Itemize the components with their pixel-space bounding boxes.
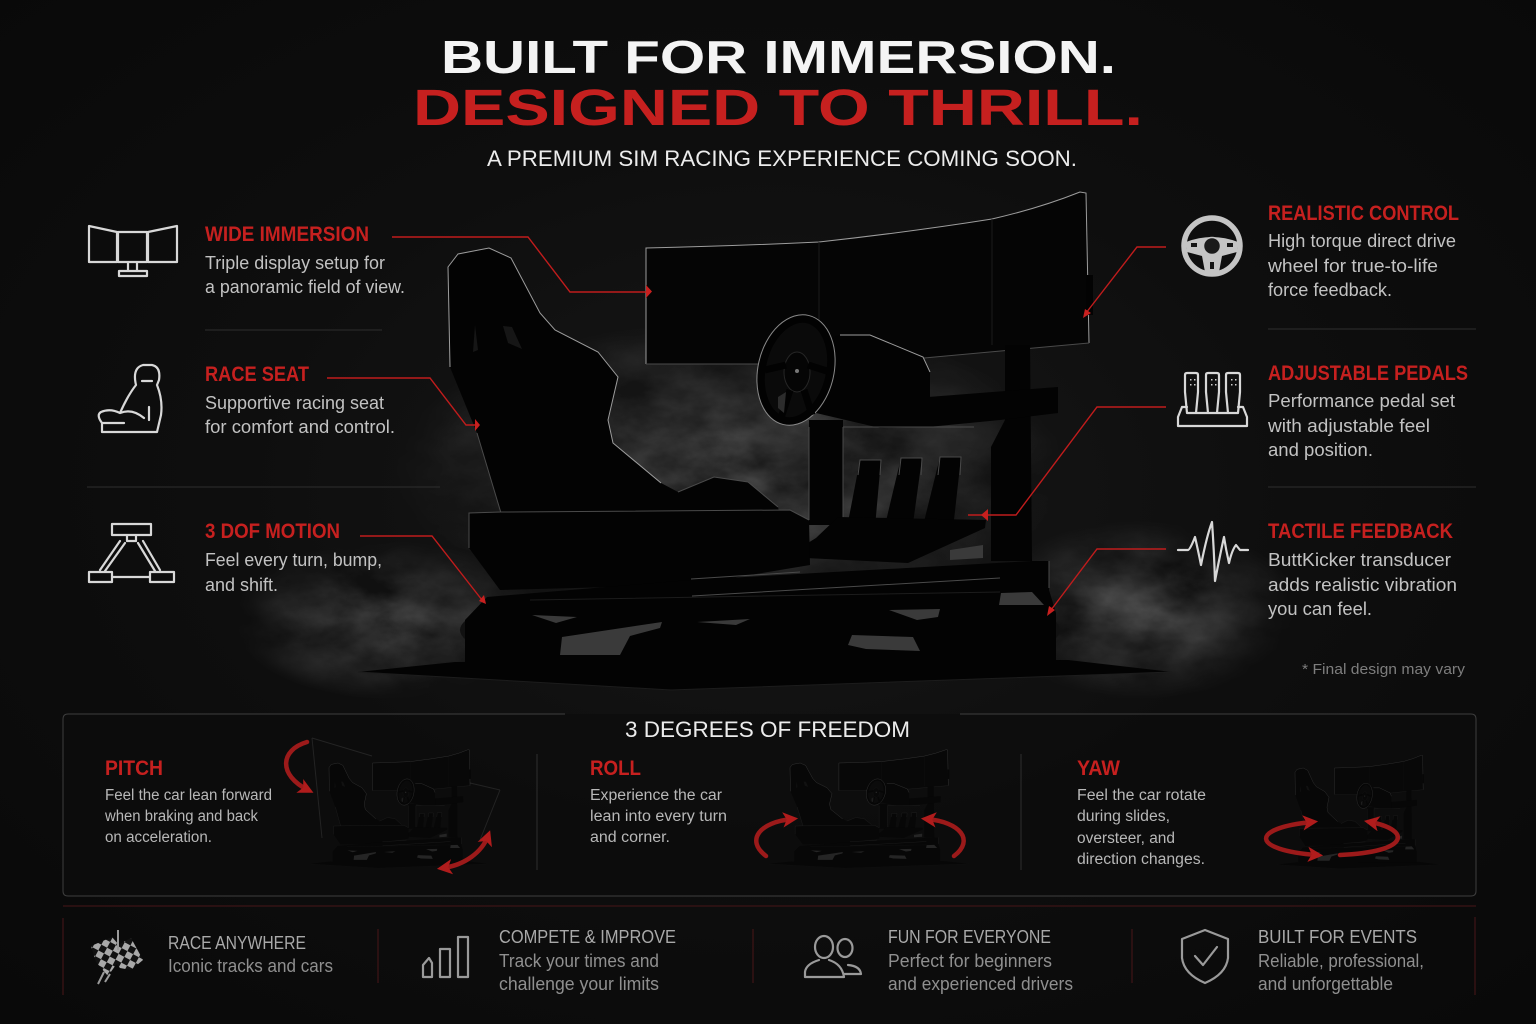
- item: race anywhere: [168, 933, 333, 976]
- item: built for events: and unforgettable: [1258, 974, 1393, 994]
- yaw section: YAW: [1077, 757, 1120, 780]
- feature: adjustable pedals: [1267, 362, 1468, 460]
- headline line 2: DESIGNED TO THRILL.: [413, 79, 1143, 136]
- feature: wide immersion: [205, 223, 405, 297]
- panel: left features: [87, 223, 440, 595]
- support columns: [809, 345, 1032, 561]
- feature: wide immersion: a panoramic field of view.: [205, 277, 405, 297]
- feature: adjustable pedals: ADJUSTABLE PEDALS: [1268, 362, 1468, 385]
- race seat: [448, 248, 790, 560]
- feature: realistic control: High torque direct drive: [1268, 231, 1456, 251]
- base gaps: [532, 592, 1044, 655]
- feature: tactile feedback: you can feel.: [1268, 599, 1372, 619]
- yaw section: oversteer, and: [1077, 830, 1175, 847]
- item: fun for everyone: Perfect for beginners: [888, 951, 1052, 971]
- cockpit frame: [465, 561, 1056, 662]
- icon: race seat: [99, 365, 162, 432]
- yaw section: during slides,: [1077, 808, 1170, 825]
- feature: 3 DOF motion: 3 DOF MOTION: [205, 520, 340, 543]
- icon: bar chart: [423, 937, 468, 977]
- item: built for events: [1258, 927, 1424, 994]
- feature: race seat: RACE SEAT: [205, 363, 309, 386]
- item: fun for everyone: FUN FOR EVERYONE: [888, 927, 1051, 947]
- item: race anywhere: Iconic tracks and cars: [168, 956, 333, 976]
- icon: checkered flags: [91, 930, 143, 984]
- icon: people: [805, 936, 861, 977]
- feature: race seat: Supportive racing seat: [205, 393, 384, 413]
- callout lines: [327, 237, 1166, 616]
- item: compete and improve: Track your times and: [499, 951, 659, 971]
- roll section: and corner.: [590, 829, 670, 846]
- callout: race seat: [327, 378, 480, 431]
- yaw section: Feel the car rotate: [1077, 787, 1206, 804]
- roll section: [590, 757, 727, 846]
- feature: adjustable pedals: with adjustable feel: [1267, 416, 1430, 436]
- headline line 1: BUILT FOR IMMERSION.: [441, 31, 1116, 83]
- icon: 3 DOF motion: [89, 524, 174, 582]
- panel frame: [63, 714, 1476, 896]
- panel heading: 3 DEGREES OF FREEDOM: [625, 717, 910, 742]
- callout: realistic control: [1083, 247, 1166, 318]
- feature: realistic control: REALISTIC CONTROL: [1268, 202, 1459, 225]
- feature: tactile feedback: [1268, 520, 1457, 619]
- sim rig silhouette: [358, 192, 1172, 690]
- title: [413, 31, 1143, 171]
- callout: wide immersion: [392, 237, 652, 298]
- feature: race seat: for comfort and control.: [205, 417, 395, 437]
- feature: 3 DOF motion: Feel every turn, bump,: [205, 550, 382, 570]
- feature: wide immersion: Triple display setup for: [205, 253, 385, 273]
- roll section: Experience the car: [590, 787, 722, 804]
- item: built for events: BUILT FOR EVENTS: [1258, 927, 1417, 947]
- pitch diagram: [286, 738, 500, 868]
- item: compete and improve: challenge your limits: [499, 974, 659, 994]
- feature: tactile feedback: adds realistic vibration: [1268, 575, 1457, 595]
- subtitle: A PREMIUM SIM RACING EXPERIENCE COMING SOON.: [487, 146, 1077, 171]
- feature: 3 DOF motion: [205, 520, 382, 595]
- icon: shield: [1182, 930, 1228, 983]
- pitch section: PITCH: [105, 757, 163, 780]
- feature: wide immersion: WIDE IMMERSION: [205, 223, 369, 246]
- feature: tactile feedback: TACTILE FEEDBACK: [1268, 520, 1453, 543]
- feature: tactile feedback: ButtKicker transducer: [1268, 550, 1451, 570]
- steering wheel base: [811, 335, 930, 428]
- item: compete and improve: COMPETE & IMPROVE: [499, 927, 676, 947]
- panel: right features: [1178, 202, 1476, 678]
- feature: race seat: [205, 363, 395, 437]
- footnote: * Final design may vary: [1302, 661, 1466, 678]
- callout: pedals: [968, 407, 1166, 521]
- roll diagram: [756, 750, 969, 868]
- yaw section: direction changes.: [1077, 851, 1205, 868]
- pedals: [785, 457, 986, 563]
- icon: triple display: [89, 226, 177, 276]
- callout: motion: [360, 536, 486, 604]
- item: fun for everyone: [888, 927, 1073, 994]
- seat rail: [469, 510, 810, 590]
- icon: vibration waveform: [1178, 522, 1248, 581]
- roll section: lean into every turn: [590, 808, 727, 825]
- item: race anywhere: RACE ANYWHERE: [168, 933, 306, 953]
- yaw diagram: [1266, 755, 1440, 869]
- feature: adjustable pedals: Performance pedal set: [1268, 391, 1455, 411]
- yaw section: [1077, 757, 1206, 868]
- item: compete and improve: [499, 927, 676, 994]
- item: built for events: Reliable, professional,: [1258, 951, 1424, 971]
- pitch section: when braking and back: [104, 808, 258, 825]
- pitch section: Feel the car lean forward: [105, 787, 272, 804]
- pitch section: on acceleration.: [105, 829, 212, 846]
- callout: tactile: [1047, 549, 1166, 616]
- bottom feature strip: [63, 906, 1476, 995]
- feature: 3 DOF motion: and shift.: [205, 575, 278, 595]
- icon: steering wheel: [1184, 218, 1240, 274]
- item: fun for everyone: and experienced drivers: [888, 974, 1073, 994]
- feature: adjustable pedals: and position.: [1268, 440, 1373, 460]
- pitch section: [104, 757, 272, 846]
- steering wheel: [746, 307, 846, 433]
- roll section: ROLL: [590, 757, 641, 780]
- icon: pedals: [1178, 373, 1247, 426]
- triple monitors: [646, 192, 1089, 364]
- floor platform: [358, 660, 1172, 690]
- feature: realistic control: [1267, 202, 1459, 300]
- feature: realistic control: wheel for true-to-life: [1267, 256, 1438, 276]
- feature: realistic control: force feedback.: [1268, 280, 1392, 300]
- panel: 3 degrees of freedom: [63, 714, 1476, 896]
- smoke haze: [258, 345, 1268, 688]
